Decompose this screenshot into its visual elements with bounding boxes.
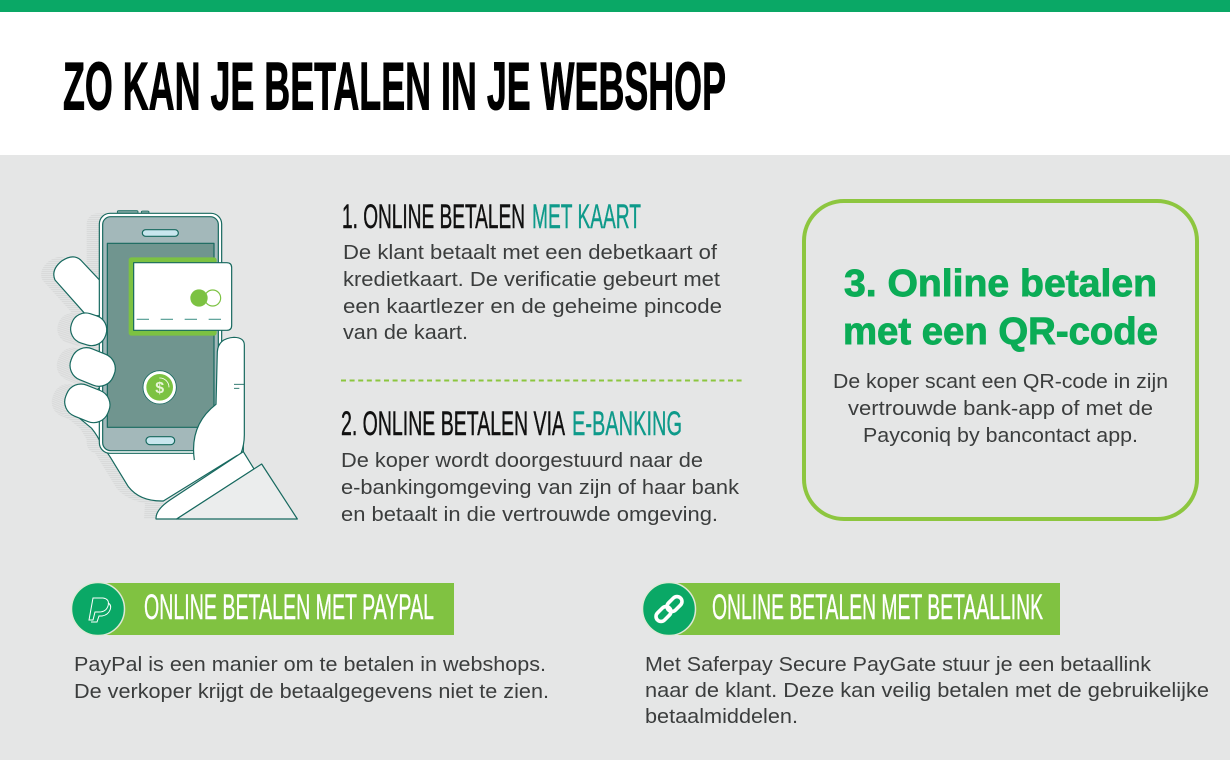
section 2 text: e-bankingomgeving van zijn of haar bank <box>341 477 740 499</box>
PayPal text <box>74 654 549 703</box>
QR heading <box>843 263 1158 353</box>
cuff and sleeve <box>156 452 297 519</box>
dollar button <box>143 371 176 404</box>
section 1 text: een kaartlezer en de geheime pincode <box>343 296 722 318</box>
PayPal banner: ONLINE BETALEN MET PAYPAL <box>144 588 434 627</box>
top green band <box>0 0 1230 12</box>
section 1 text: van de kaart. <box>343 322 468 344</box>
section 2 text: De koper wordt doorgestuurd naar de <box>341 450 703 472</box>
card on screen <box>129 257 232 336</box>
payment link text: naar de klant. Deze kan veilig betalen met de gebruikelijke <box>645 680 1209 702</box>
payment link text: Met Saferpay Secure PayGate stuur je een betaallink <box>645 654 1152 676</box>
icon: PayPal <box>72 582 124 636</box>
illustration: hand holding phone <box>41 211 297 519</box>
section 1 text <box>343 242 722 344</box>
palm behind phone <box>72 362 243 501</box>
payment link text <box>645 654 1209 728</box>
icon: chain link <box>642 582 696 636</box>
section 1 text: De klant betaalt met een debetkaart of <box>343 242 717 264</box>
QR heading: 3. Online betalen <box>844 263 1157 305</box>
index finger <box>54 257 102 316</box>
PayPal banner <box>72 582 454 636</box>
panel: QR code <box>804 201 1197 519</box>
section 1 heading: MET KAART <box>532 198 641 236</box>
dollar button: $ <box>155 380 164 397</box>
PayPal text: PayPal is een manier om te betalen in webshops. <box>74 654 546 676</box>
thumb <box>194 337 244 460</box>
section 1 text: kredietkaart. De verificatie gebeurt met <box>343 269 720 291</box>
section 2 heading: 2. ONLINE BETALEN VIA <box>341 405 565 443</box>
section 2 heading: E-BANKING <box>572 405 682 443</box>
PayPal text: De verkoper krijgt de betaalgegevens niet te zien. <box>74 681 549 703</box>
QR heading: met een QR-code <box>843 311 1158 353</box>
section 2 text <box>341 450 740 526</box>
QR text: De koper scant een QR-code in zijn <box>833 371 1168 393</box>
illustration shadow <box>41 213 163 519</box>
payment link text: betaalmiddelen. <box>645 706 798 728</box>
QR text: vertrouwde bank-app of met de <box>848 398 1153 420</box>
QR text <box>833 371 1168 447</box>
payment link banner <box>642 582 1060 636</box>
phone <box>99 211 222 453</box>
section 1 heading: 1. ONLINE BETALEN <box>342 198 525 236</box>
QR text: Payconiq by bancontact app. <box>863 425 1138 447</box>
section 2 text: en betaalt in die vertrouwde omgeving. <box>341 504 718 526</box>
fingers <box>60 309 120 427</box>
